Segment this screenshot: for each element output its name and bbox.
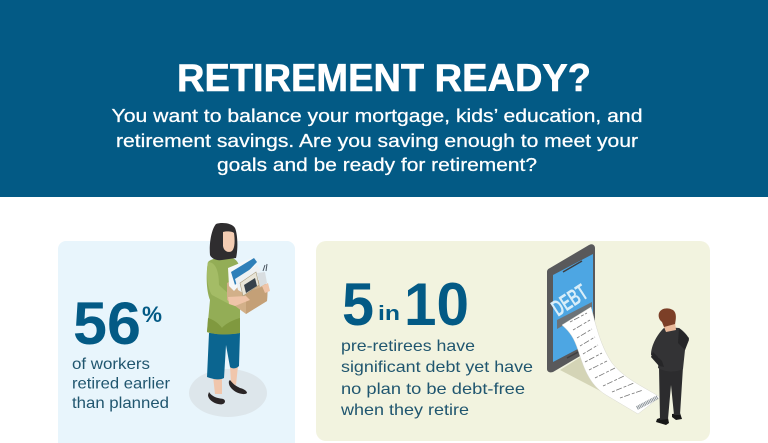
panel: workers retired early	[58, 223, 295, 443]
description: workers: retired earlier	[72, 376, 171, 392]
intro text: You want to balance your mortgage, kids’ education, and	[112, 106, 642, 126]
description: debt: pre-retirees have	[341, 338, 475, 355]
statistic: 5 in 10	[342, 271, 469, 338]
statistic: 5 in 10: 5	[342, 271, 374, 338]
description: debt: no plan to be debt-free	[341, 381, 525, 398]
intro text: goals and be ready for retirement?	[217, 155, 537, 175]
statistic: 5 in 10: in	[378, 303, 400, 325]
illustration: phone with debt receipt	[546, 244, 689, 425]
statistic: 5 in 10: 10	[404, 271, 469, 338]
header banner	[0, 0, 768, 197]
description: debt: significant debt yet have	[341, 359, 533, 376]
text: debt on phone: DEBT	[546, 278, 593, 321]
intro text	[112, 106, 642, 175]
title: RETIREMENT READY?	[177, 57, 591, 100]
panel: pre-retiree debt	[316, 241, 710, 441]
intro text: retirement savings. Are you saving enough to meet your	[116, 131, 638, 151]
illustration: woman carrying box	[189, 223, 270, 417]
statistic: 56%: 56	[73, 290, 141, 357]
description: workers	[72, 356, 171, 412]
statistic: 56%: %	[142, 302, 162, 327]
description: debt: when they retire	[340, 402, 469, 419]
description: workers: of workers	[72, 356, 150, 373]
figure: man in suit	[651, 308, 689, 425]
description: workers: than planned	[72, 395, 169, 412]
description: debt	[340, 338, 533, 419]
